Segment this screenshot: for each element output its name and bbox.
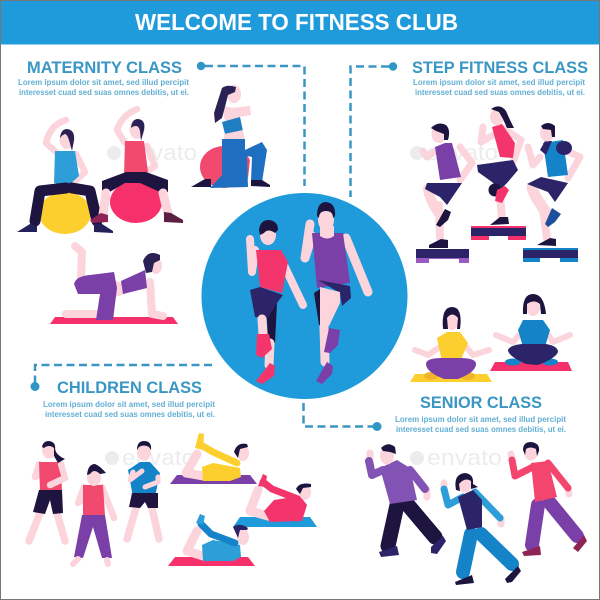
step platform: pink [471, 226, 526, 240]
watermarks: envato [122, 445, 195, 470]
heading block: maternity class: Lorem ipsum dolor sit amet, sed illud percipit [18, 77, 189, 87]
figure: senior woman in pink [511, 442, 587, 556]
figure: girl in purple trousers [73, 464, 114, 564]
figure: central woman [250, 220, 303, 384]
figure: yellow bow pose on purple mat [170, 433, 257, 484]
figure: senior woman in blue [444, 473, 521, 585]
figure: woman on all fours on mat [50, 246, 178, 324]
figure: pink bow pose on blue mat [233, 474, 317, 527]
figure: step woman in pink [477, 106, 521, 225]
header banner [1, 1, 599, 44]
heading block: children class: interesset cuad sed suas omnes debitis, ut ei. [45, 409, 215, 419]
connector: senior [304, 403, 382, 431]
heading block: step fitness class: interesset cuad sed suas omnes debitis, ut ei. [415, 87, 585, 97]
heading block: children class [43, 378, 215, 419]
figure: central man [305, 202, 368, 384]
heading block: maternity class: MATERNITY CLASS [27, 58, 182, 77]
central circle [202, 193, 408, 399]
heading block: maternity class [18, 58, 189, 97]
connector: children [30, 365, 212, 391]
figure: meditating woman on yellow mat [410, 307, 492, 382]
figure: girl in pink top [29, 441, 65, 541]
heading block: step fitness class: Lorem ipsum dolor sit amet, sed illud percipit [413, 77, 585, 87]
heading block: step fitness class [412, 58, 588, 97]
title: WELCOME TO FITNESS CLUB [135, 9, 458, 35]
heading block: senior class: SENIOR CLASS [420, 393, 542, 412]
watermarks [105, 140, 502, 470]
connector: maternity [197, 62, 304, 186]
watermarks: envato [427, 445, 502, 470]
figure: woman on yellow ball [17, 120, 113, 234]
figure: woman lunging on ball [191, 85, 270, 188]
figure: meditating woman on pink mat [490, 294, 572, 371]
figure: step man in purple [423, 124, 472, 248]
step platform: purple [416, 249, 469, 263]
heading block: senior class [395, 393, 566, 434]
heading block: maternity class: interesset cuad sed suas omnes debitis, ut ei. [19, 87, 189, 97]
figure: step man in blue [527, 123, 580, 246]
figure: woman on pink ball [90, 109, 183, 223]
heading block: step fitness class: STEP FITNESS CLASS [412, 58, 588, 77]
heading block: children class: CHILDREN CLASS [57, 378, 202, 397]
heading block: senior class: Lorem ipsum dolor sit amet, sed illud percipit [395, 414, 566, 424]
figure: blue bow pose on pink mat [168, 514, 255, 566]
figure: boy in blue shirt [127, 441, 160, 539]
heading block: children class: Lorem ipsum dolor sit amet, sed illud percipit [43, 399, 215, 409]
figure: senior man in purple jacket [369, 444, 446, 557]
watermarks: envato [426, 140, 498, 165]
watermarks: envato [124, 140, 197, 165]
heading block: senior class: interesset cuad sed suas omnes debitis, ut ei. [396, 424, 566, 434]
connector: step fitness [350, 62, 397, 197]
step platform: blue [523, 248, 578, 262]
